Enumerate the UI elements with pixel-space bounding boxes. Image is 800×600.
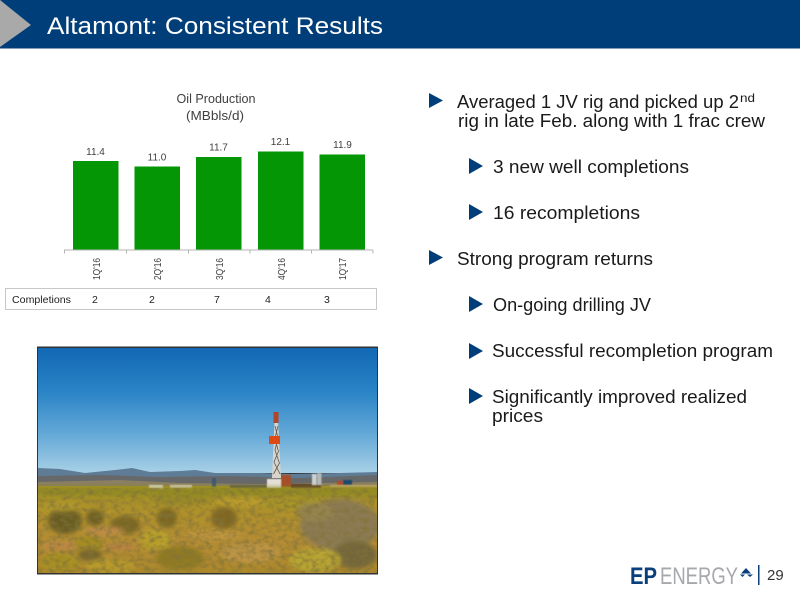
- completions table: [6, 288, 376, 310]
- bullet: averaged rig: nd: [740, 91, 755, 105]
- ground: [38, 486, 377, 574]
- sub-bullet: recompletion program: Successful recompletion program: [492, 341, 773, 361]
- rig derrick: [269, 412, 281, 478]
- bar value labels: 11.4: [86, 147, 105, 158]
- sub-bullet: well completions: 3 new well completions: [493, 157, 689, 177]
- footer divider: [758, 565, 760, 585]
- sub-bullet: recompletions: 16 recompletions: [493, 203, 640, 223]
- completions table: 3: [324, 294, 330, 306]
- sky: [38, 348, 377, 473]
- shrub texture: [38, 487, 380, 573]
- completions table: 2: [92, 294, 98, 306]
- bar value labels: 11.9: [333, 140, 352, 151]
- completions table: 4: [265, 294, 271, 306]
- chart title: (MBbls/d): [186, 109, 244, 123]
- bar value labels: 12.1: [271, 137, 291, 148]
- sub-bullet: realized prices: prices: [492, 406, 543, 426]
- logo: EP Energy: EP: [630, 563, 657, 590]
- mountains: [38, 468, 377, 478]
- quarter labels: 3Q'16: [215, 258, 226, 280]
- icon: grey header triangle: [0, 0, 31, 47]
- bullet: averaged rig: rig in late Feb. along with 1 frac crew: [458, 111, 766, 131]
- bars: [73, 152, 365, 250]
- sub-bullet: drilling JV: On-going drilling JV: [493, 295, 651, 315]
- chart title: [176, 92, 256, 123]
- quarter labels: 1Q'16: [92, 258, 103, 280]
- bar value labels: [86, 137, 352, 164]
- sub-bullet: realized prices: Significantly improved realized: [492, 387, 747, 407]
- quarter labels: [92, 258, 349, 280]
- header band: [0, 0, 800, 48]
- bar value labels: 11.7: [209, 142, 228, 154]
- page number: 29: [767, 567, 784, 584]
- quarter labels: 1Q'17: [338, 258, 349, 280]
- completions table: 7: [214, 294, 220, 306]
- x axis: [64, 250, 373, 254]
- icon: logo mountain: [740, 568, 753, 577]
- chart title: Oil Production: [176, 92, 256, 106]
- bullet: averaged rig: Averaged 1 JV rig and picked up 2: [457, 92, 739, 112]
- photo: drilling rig in scrubland: [37, 346, 380, 574]
- completions table: 2: [149, 294, 155, 306]
- bullet: program returns: Strong program returns: [457, 249, 653, 269]
- far facilities: [149, 473, 377, 489]
- bullet: averaged rig: [429, 91, 766, 131]
- logo: EP Energy: ENERGY: [660, 563, 738, 590]
- quarter labels: 2Q'16: [153, 258, 164, 280]
- sub-bullet: realized prices: [469, 387, 747, 426]
- bar value labels: 11.0: [148, 152, 167, 164]
- ground grain: [38, 488, 377, 574]
- title: Altamont: Consistent Results: [47, 13, 383, 40]
- completions table: Completions: [12, 294, 71, 306]
- quarter labels: 4Q'16: [277, 258, 288, 280]
- bullet list: [429, 91, 773, 426]
- panel: oil production chart: [64, 92, 373, 280]
